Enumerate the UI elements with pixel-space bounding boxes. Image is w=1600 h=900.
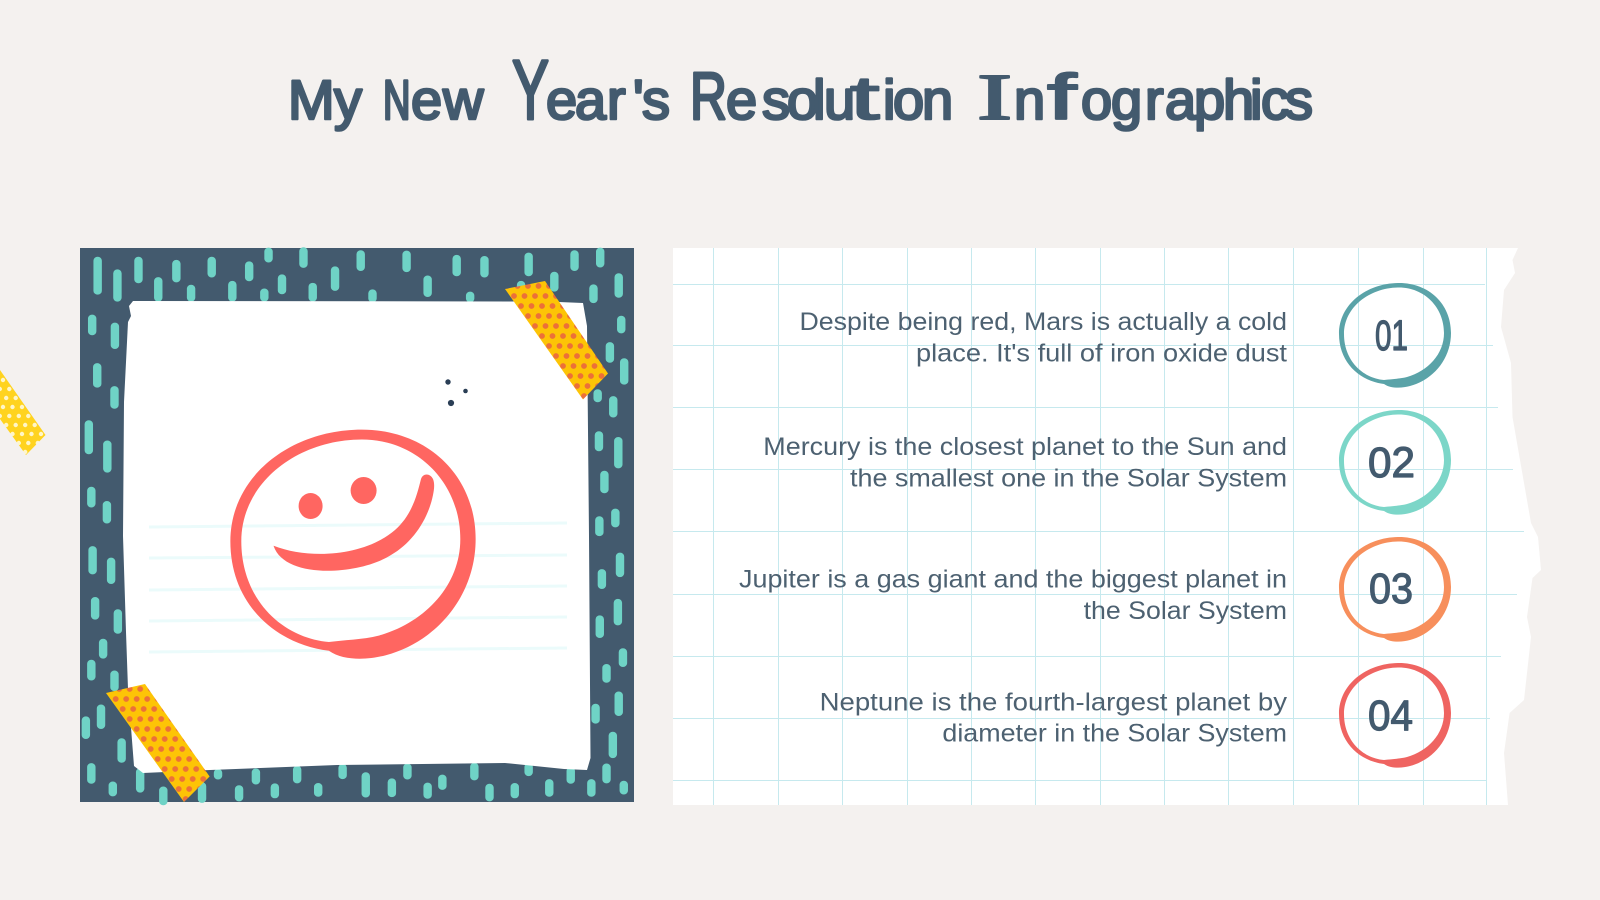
- number badge 03: [1339, 537, 1451, 642]
- item 1 text: [800, 308, 1287, 368]
- item 2 text: Mercury is the closest planet to the Sun and: [763, 433, 1287, 461]
- item 3 text: Jupiter is a gas giant and the biggest planet in: [739, 566, 1287, 594]
- number badge 04: [1339, 663, 1451, 768]
- item 3 text: [739, 566, 1287, 625]
- number badge 03: 03: [1369, 565, 1413, 613]
- white paper sheet: [123, 301, 590, 773]
- tape: left edge: [0, 370, 46, 455]
- tape: bottom left: [106, 684, 210, 802]
- item 1 text: Despite being red, Mars is actually a cold: [800, 308, 1287, 336]
- title: ear's: [546, 68, 670, 131]
- title: ew: [411, 68, 484, 131]
- item 4 text: [820, 688, 1288, 748]
- title: t: [850, 64, 880, 132]
- title: Y: [512, 45, 549, 138]
- item 4 text: Neptune is the fourth-largest planet by: [820, 688, 1288, 716]
- panel: notebook paper: [673, 248, 1541, 805]
- number badge 01: [1339, 283, 1451, 388]
- item 4 text: diameter in the Solar System: [942, 720, 1287, 748]
- title: n: [1014, 68, 1045, 131]
- torn paper sheet: [673, 248, 1541, 805]
- item 2 text: the smallest one in the Solar System: [850, 464, 1287, 492]
- item 3 text: the Solar System: [1084, 597, 1287, 625]
- title: My: [288, 68, 362, 131]
- title: ion: [883, 68, 953, 131]
- title: R: [690, 58, 727, 134]
- number badge 04: 04: [1368, 692, 1413, 740]
- panel: smiley note: [80, 248, 634, 802]
- title: [288, 45, 1313, 138]
- smiley face: [230, 430, 476, 659]
- teal brush marks: [86, 251, 624, 801]
- grid lines: [673, 248, 1524, 805]
- title: I: [977, 61, 1012, 134]
- title: ographics: [1081, 68, 1313, 131]
- number badge 02: 02: [1368, 439, 1415, 487]
- ruled lines on paper: [149, 523, 567, 652]
- item 1 text: place. It's full of iron oxide dust: [916, 340, 1287, 368]
- number badge 01: 01: [1375, 312, 1408, 360]
- title: esolu: [726, 68, 855, 131]
- item 2 text: [763, 433, 1287, 492]
- patterned panel background: [80, 248, 634, 802]
- title: N: [383, 70, 410, 132]
- tape: top right: [505, 281, 608, 400]
- number badge 02: [1339, 410, 1451, 515]
- title: f: [1047, 60, 1077, 133]
- small dark dots: [445, 379, 468, 406]
